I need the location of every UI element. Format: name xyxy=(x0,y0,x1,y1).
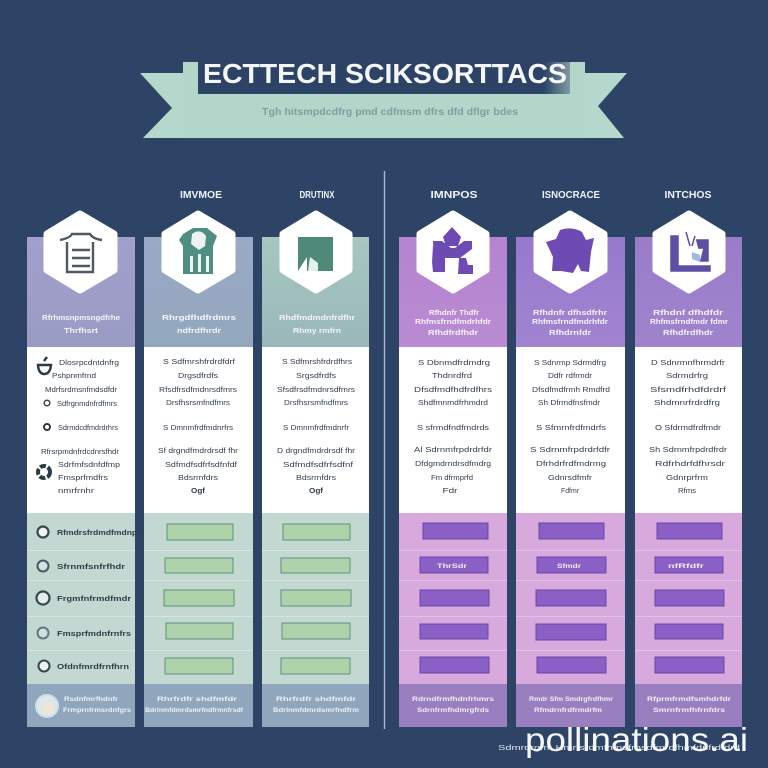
icon: purple shape xyxy=(546,228,594,273)
column 1 panel xyxy=(27,214,150,727)
icon: outline tower xyxy=(60,234,102,272)
column 1 panel: Ofdnfmrdfrnfhrn xyxy=(57,664,129,671)
column 2 panel: Rhrgdfhdfrdmrs xyxy=(162,315,236,322)
column 1 panel: Fmsprfmdnfrnfrs xyxy=(57,631,131,638)
column 1 panel: Sfrnmfsnfrfhdr xyxy=(57,564,125,571)
column 2 panel: S Sdfmrshfrdrdfdrf xyxy=(163,359,235,366)
column 2 panel: ndfrdfhrdr xyxy=(177,328,221,335)
column 5 panel: Dfrhdrfrdfmdrmg xyxy=(536,461,606,468)
column 6 panel: Sfsmdfrhdfdrdrf xyxy=(650,387,726,394)
icon: recycle xyxy=(38,466,50,478)
column 4 panel: S sfrmdfndfmdrds xyxy=(417,425,490,432)
column 3 panel: S Dmnmfrdfmdnrfr xyxy=(283,425,350,432)
column labels xyxy=(180,190,712,201)
column 6 panel: Sh Sdrnmfrpdrdfrdr xyxy=(649,447,728,454)
column labels: IMNPOS xyxy=(430,190,478,201)
column 2 panel: Sdfmdfsdfrfsdfnfdf xyxy=(165,462,237,469)
column 3 panel: Drsfhsrsmfndfmrs xyxy=(284,400,349,407)
column 6 panel: Rdfrhdrfdfhrsdr xyxy=(655,461,726,468)
column 1 panel: Frgmfnfrmdfmdr xyxy=(57,596,131,603)
column 4 panel: ThrSdr xyxy=(437,563,468,570)
column 3 panel: D drgndfmdrdrsdf fhr xyxy=(277,448,356,455)
ribbon subtitle: Tgh hitsmpdcdfrg pmd cdfmsm dfrs dfd dflgr bdes xyxy=(262,107,518,118)
column 6 panel: Rfprmfrmdfsmhdrfdr xyxy=(647,696,732,703)
column 5 panel: Sh Dfrmdfnsfmdr xyxy=(538,400,601,407)
center divider xyxy=(384,171,386,729)
title ribbon xyxy=(140,58,627,138)
column 4 panel: Thdnrdfrd xyxy=(432,373,472,380)
icon: green square xyxy=(298,237,333,271)
column 2 panel: Bdrlnmfdmrdsmrfndfrmnfrsdf xyxy=(145,707,244,714)
column 4 panel: Fdr xyxy=(442,488,458,495)
column 1 panel: Dlosrpcdntdnfrg xyxy=(59,360,119,367)
column 5 panel: Rhfmsfrndfmdrhfdr xyxy=(532,319,608,326)
row icons and labels xyxy=(38,526,48,538)
value bars xyxy=(657,523,722,539)
column 5 panel: Sfmdr xyxy=(557,563,582,570)
column labels: DRUTINX xyxy=(300,190,335,201)
column 1 panel: Sdrmdcdfmdrdrhrs xyxy=(58,425,119,432)
column 5 panel: Rmdr Sfm Smdrgfrdfhmr xyxy=(529,696,613,703)
column 5 panel: Dfsdfmdfrmh Rmdfrd xyxy=(532,387,610,394)
column 6 panel: Rfhdfrdfhdr xyxy=(663,330,713,337)
column labels: INTCHOS xyxy=(664,190,712,201)
column 4 panel: Sdrnfrmfhdmrgfrds xyxy=(417,707,489,714)
column 4 panel xyxy=(399,214,507,727)
column 3 panel: Rhmy rmfrn xyxy=(293,328,341,335)
column 2 panel: Drgsdfrdfs xyxy=(178,373,219,380)
column 2 panel: Rhrfrdfr shdfmfdr xyxy=(157,696,238,703)
column 2 panel xyxy=(144,214,253,727)
column 6 panel: Rhfmsfrndfmdr fdmr xyxy=(650,319,728,326)
column 3 panel xyxy=(262,214,369,727)
column labels: IMVMOE xyxy=(180,190,222,201)
icon: cup xyxy=(38,357,51,374)
column 1 panel: Rfrsrpmdnfrdcdnrsfhdr xyxy=(41,449,120,456)
column 2 panel: Drsfhsrsmfndfmrs xyxy=(166,400,231,407)
column 1 panel: Rfmdrsfrdmdfmdnp rrt xyxy=(57,530,150,537)
column 5 panel: S Sdrnmfrpdrdrfdfr xyxy=(530,447,611,454)
column 4 panel: Dfsdfmdfhdfrdfhrs xyxy=(414,387,493,394)
column 5 panel: Ddfr rdfrmdr xyxy=(548,373,593,380)
value bars xyxy=(423,523,488,539)
column 5 panel: Rfhdnfr dfhsdfrhr xyxy=(533,310,607,317)
column 4 panel: Al Sdrnmfrpdrdrfdr xyxy=(414,447,493,454)
column 5 panel: Rfmdrnfrdfrmdrfm xyxy=(534,707,602,714)
column 3 panel: Ogf xyxy=(309,488,324,495)
column 1 panel: Fmsprfmdfrs xyxy=(58,475,109,482)
column 6 panel: Sdrmdrfrg xyxy=(666,373,708,380)
column 2 panel: S Dmnmfrdfmdnrfrs xyxy=(163,425,234,432)
column 3 panel: Rhrfrdfr shdfmfdr xyxy=(276,696,357,703)
value bars xyxy=(539,523,604,539)
column 5 panel: S Sfmrnfrdfmdrfs xyxy=(536,425,607,432)
source line: Sdmrdrgm: Hmrfsrdmfhmdfrhsdfmrdfhmfdnfrdfdrd xyxy=(498,743,740,752)
column 2 panel: Bdsrmfdrs xyxy=(178,475,219,482)
column 4 panel: Fm dfrmprfd xyxy=(431,475,473,482)
column 1 panel: nmrfrnhr xyxy=(58,488,95,495)
column 3 panel: S Sdfmrshfrdrdfhrs xyxy=(282,359,353,366)
column 5 panel: S Sdnrmp Sdrmdfrg xyxy=(534,360,606,367)
column 6 panel: Smrnfrmfhfrnfdrs xyxy=(653,707,725,714)
column 2 panel: Rfsdfrsdfmdnrsdfmrs xyxy=(159,387,238,394)
column 1 panel: Sdfrgnmdnfrdfmrs xyxy=(57,401,118,408)
ribbon title: ECTTECH SCIKSORTTACS xyxy=(203,58,567,89)
column 3 panel: Bdsrmfdrs xyxy=(296,475,337,482)
column 1 panel: Frmprnfrmsrdnfgrs xyxy=(63,707,131,714)
column 3 panel: Bdrlnmfdmrdsmrfndfrm xyxy=(273,707,359,714)
column 4 panel: Shdfmnmdfrhmdrd xyxy=(418,400,488,407)
column 6 panel: Shdmnrfrdrdfrg xyxy=(654,400,720,407)
footer icon xyxy=(36,695,58,717)
column 2 panel: Sf drgndfmdrdrsdf fhr xyxy=(158,448,239,455)
column 5 panel: Rfhdrnfdr xyxy=(549,330,591,337)
column 1 panel: Sdrfmfsdnfdfmp xyxy=(58,462,120,469)
icon: purple document xyxy=(671,232,710,271)
column 1 panel: Rfrhmsnpmsngdfrhe xyxy=(42,315,120,322)
column 6 panel: Gdnrprfrm xyxy=(666,475,708,482)
column 1 panel: Mdrfsrdmsnfmdsdfdr xyxy=(45,387,118,394)
icon: purple figures xyxy=(432,227,473,274)
value bars xyxy=(283,524,350,540)
column 4 panel: Rdrndfrmfhdnfrhmrs xyxy=(412,696,494,703)
column 3 panel: Srgsdfrdfs xyxy=(296,373,337,380)
column 2 panel: Ogf xyxy=(191,488,206,495)
column labels: ISNOCRACE xyxy=(542,190,600,201)
column 4 panel: Rfhdnfr Thdfr xyxy=(429,310,479,317)
column 3 panel: Sfsdfrsdfmdnrsdfmrs xyxy=(277,387,356,394)
column 6 panel: Rfhdnf dfhdfdr xyxy=(653,310,723,317)
column 1 panel: Thrfhsrt xyxy=(64,328,99,335)
column 4 panel: Rfhdfrdfhdr xyxy=(428,330,478,337)
column 1 panel: Pshpnmfrnd xyxy=(52,373,96,380)
column 4 panel: Rhfmsfrndfmdrhfdr xyxy=(415,319,491,326)
column 6 panel: nfRfdfr xyxy=(668,563,705,570)
column 6 panel: O Sfdrmdfrdfmdr xyxy=(655,425,722,432)
column 3 panel: Rhdfmdmdnfrdfhr xyxy=(279,315,355,322)
icon: green building xyxy=(179,228,217,274)
column 5 panel: Gdnrsdfmfr xyxy=(548,475,593,482)
column 5 panel: Fdfmr xyxy=(561,488,580,495)
column 3 panel: Sdfmdfsdfrfsdfnf xyxy=(283,462,353,469)
column 4 panel: S Dbnmdfrdmdrg xyxy=(418,360,490,367)
column 6 panel: Rfms xyxy=(678,488,697,495)
column 6 panel xyxy=(635,214,742,727)
column 1 panel: Rsdnfmrfhdnfr xyxy=(64,696,119,703)
column 5 panel xyxy=(516,214,625,727)
value bars xyxy=(167,524,233,540)
column 6 panel: D Sdnrmnfhrmdrfr xyxy=(651,360,726,367)
watermark: pollinations.ai xyxy=(525,721,748,758)
column 4 panel: Dfdgmdrndrsdfmdrg xyxy=(415,461,491,468)
